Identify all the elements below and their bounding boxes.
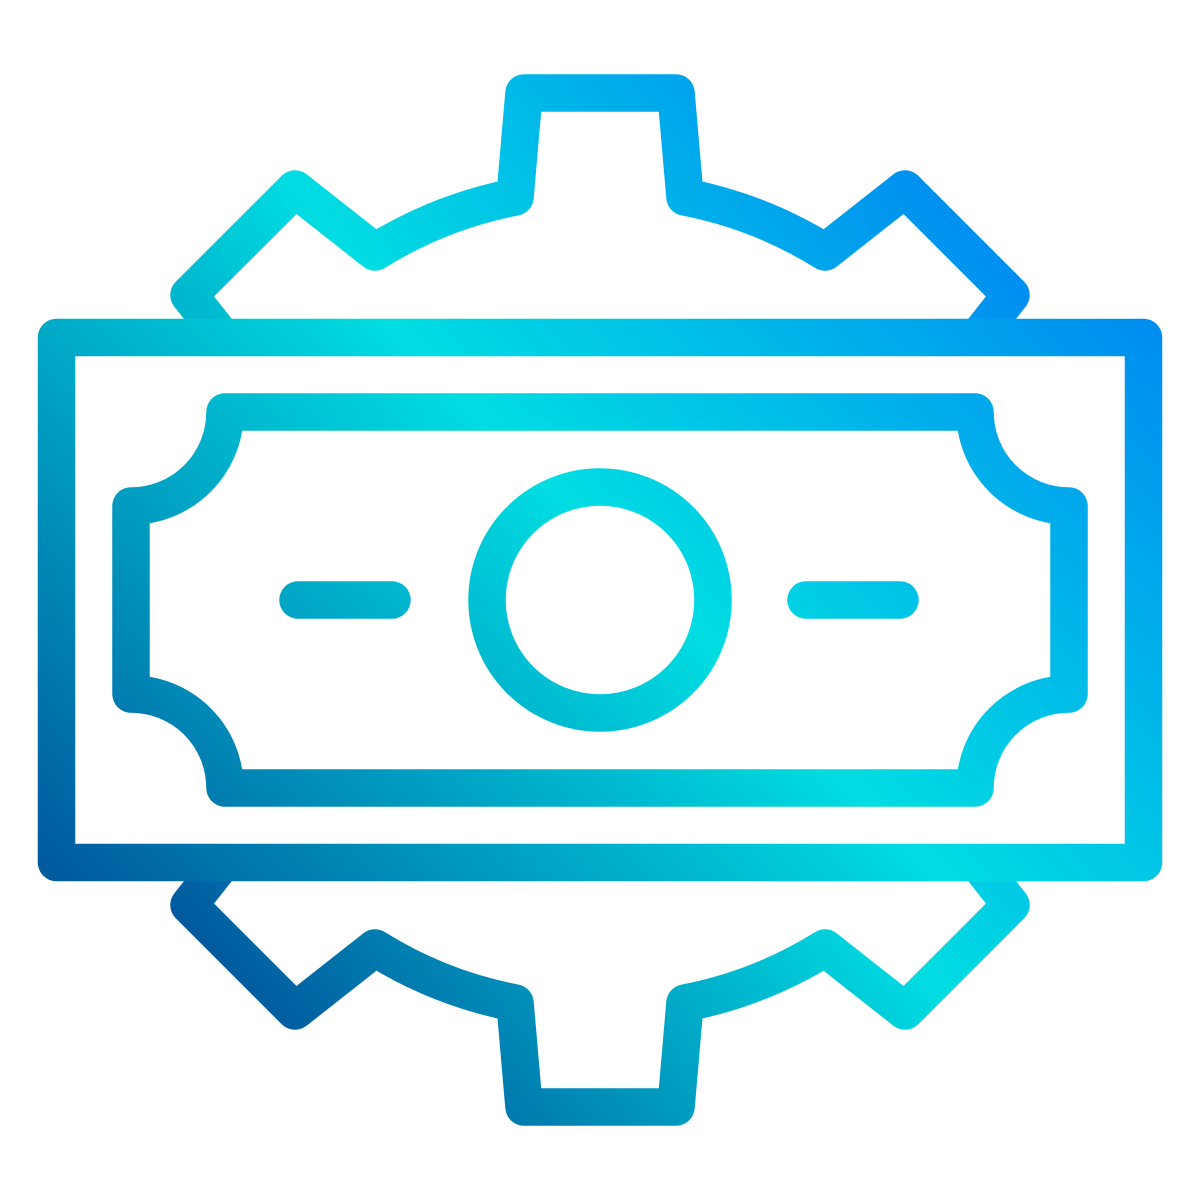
gear top half bbox=[189, 93, 1011, 338]
gear outline bbox=[189, 93, 1011, 1107]
banknote inner border bbox=[131, 412, 1069, 788]
gear bottom half bbox=[189, 862, 1011, 1107]
left dash bbox=[298, 581, 392, 619]
center circle bbox=[487, 487, 713, 713]
banknote bbox=[56, 338, 1144, 862]
banknote outer frame bbox=[56, 338, 1144, 862]
right dash bbox=[806, 581, 900, 619]
